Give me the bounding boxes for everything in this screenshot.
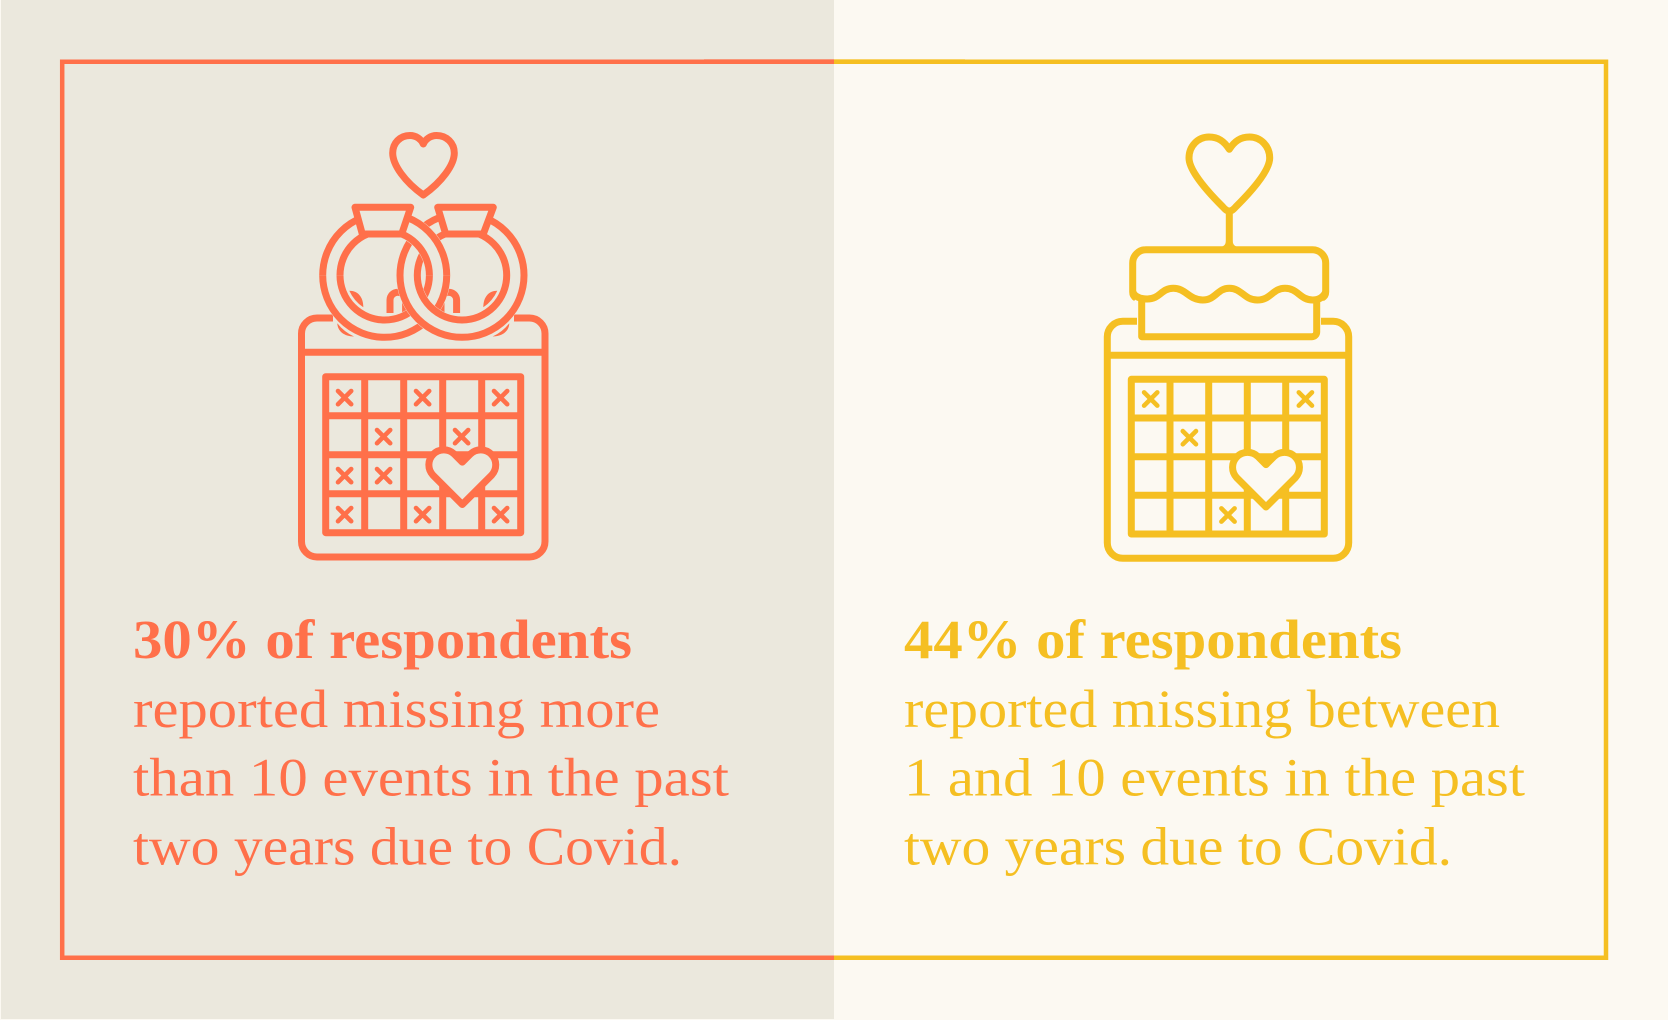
text: left statistic: than 10 events in the past bbox=[133, 748, 729, 808]
cake lower tier bbox=[1142, 300, 1317, 337]
calendar body bbox=[302, 318, 545, 557]
panel: right background bbox=[834, 0, 1668, 1020]
text: left statistic: 30% of respondents bbox=[133, 609, 632, 670]
calendar body bbox=[1107, 321, 1349, 558]
left ring upper overlap bbox=[319, 222, 450, 276]
left ring band bbox=[323, 213, 447, 337]
text: left statistic: two years due to Covid. bbox=[133, 816, 682, 876]
cake topper stem bbox=[1219, 210, 1240, 250]
text: right statistic: 1 and 10 events in the past bbox=[904, 748, 1525, 808]
panel: left background bbox=[1, 0, 834, 1019]
calendar heart bbox=[1233, 452, 1299, 507]
text: right statistic bbox=[904, 609, 1525, 876]
icon: calendar with wedding rings and heart bbox=[302, 136, 545, 557]
right ring band bbox=[400, 213, 524, 337]
icing wave bbox=[1133, 288, 1326, 300]
text: left statistic bbox=[133, 609, 729, 876]
calendar heart bbox=[429, 450, 496, 504]
cake topper heart bbox=[1189, 137, 1270, 211]
text: right statistic: reported missing between bbox=[904, 679, 1500, 739]
left ring gem bbox=[355, 207, 411, 234]
crossed-out dates bbox=[1144, 392, 1312, 522]
cake upper tier bbox=[1133, 250, 1326, 298]
calendar grid bbox=[1131, 379, 1324, 534]
icon: calendar with wedding cake and heart bbox=[1107, 137, 1349, 558]
calendar grid bbox=[326, 377, 521, 533]
binder tabs behind the rings bbox=[337, 291, 509, 336]
text: right statistic: 44% of respondents bbox=[904, 609, 1402, 670]
text: right statistic: two years due to Covid. bbox=[904, 816, 1452, 876]
floating heart bbox=[393, 136, 454, 195]
text: left statistic: reported missing more bbox=[133, 679, 660, 739]
crossed-out dates bbox=[338, 391, 507, 521]
right ring gem bbox=[438, 207, 493, 234]
